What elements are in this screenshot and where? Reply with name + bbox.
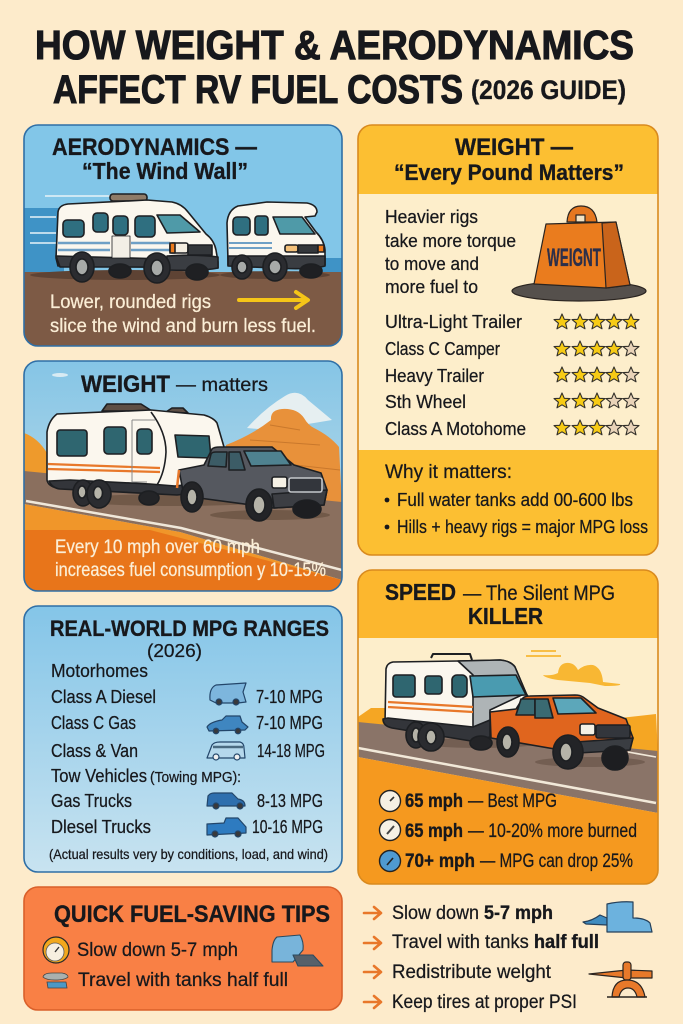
why it matters: Hills + heavy rigs = major MPG loss — [397, 517, 648, 537]
icon: gauge — [43, 937, 69, 963]
title — [35, 22, 634, 112]
tips rows — [77, 940, 288, 991]
MPG row labels: Dlesel Trucks — [51, 817, 151, 837]
MPG values: 8-13 MPG — [257, 791, 323, 811]
arrow: tip 1 — [364, 907, 381, 919]
aerodynamics caption: Lower, rounded rigs — [50, 292, 211, 313]
speed rows: — MPG can drop 25% — [480, 851, 633, 872]
panel: speed — [358, 570, 658, 884]
arrow: tip 3 — [364, 966, 381, 978]
weight matters caption: Every 10 mph over 60 mph — [55, 537, 260, 558]
aerodynamics heading: AERODYNAMICS — — [52, 134, 257, 161]
right tips list: Keep tires at proper PSI — [392, 992, 577, 1013]
illustration: grey pickup truck — [177, 447, 327, 521]
MPG footnote: (Actual results very by conditions, load, and wind) — [49, 846, 328, 862]
MPG values: 7-10 MPG — [256, 713, 323, 733]
why it matters: Why it matters: — [385, 462, 512, 483]
weight matters caption — [55, 537, 326, 581]
speed heading — [385, 579, 615, 629]
speed heading: — The Silent MPG — [463, 582, 615, 605]
speed heading: SPEED — [385, 579, 456, 605]
arrow: tip 4 — [364, 996, 381, 1008]
icon: weights — [43, 973, 68, 988]
weight intro text: take more torque — [385, 231, 516, 251]
icon: speed gauge 2 — [380, 820, 400, 840]
tips rows: Travel with tanks half full — [78, 970, 288, 991]
arrow: tip 2 — [364, 937, 381, 949]
panel: aerodynamics — [24, 125, 342, 346]
rating list labels — [385, 312, 526, 439]
weight heading: “Every Pound Matters” — [394, 160, 624, 185]
right tips list: Slow down 5-7 mph — [392, 903, 553, 924]
tips heading: QUICK FUEL-SAVING TIPS — [54, 901, 330, 928]
icon: weight block: WEIGNT — [547, 244, 601, 272]
speed rows: 65 mph — [405, 821, 463, 842]
speed rows: 65 mph — [405, 791, 463, 812]
MPG row labels: Class & Van — [51, 741, 138, 761]
panel: weight matters scene — [24, 361, 342, 591]
panel: quick fuel-saving tips — [24, 887, 342, 1010]
weight intro text: more fuel to — [385, 277, 478, 297]
icon: weight block — [512, 206, 646, 301]
weight intro text — [385, 207, 516, 297]
illustration: trailer — [383, 654, 530, 751]
icon: class A — [210, 683, 246, 705]
aerodynamics heading — [52, 134, 257, 184]
star ratings — [554, 314, 639, 435]
icon: van — [207, 742, 245, 760]
rating list labels: Sth Wheel — [385, 392, 466, 412]
speed heading: KILLER — [468, 603, 543, 629]
aerodynamics heading: “The Wind Wall” — [82, 158, 248, 184]
speed rows: — 10-20% more burned — [468, 821, 637, 842]
icon: blue tank — [583, 902, 652, 932]
icon: class C — [207, 716, 248, 734]
speed rows: — Best MPG — [468, 791, 557, 812]
MPG row labels: Motorhomes — [51, 661, 148, 681]
icon: speed gauge 1 — [380, 790, 400, 812]
MPG row labels: (Towing MPG): — [150, 769, 241, 786]
MPG values — [252, 687, 325, 837]
speed rows — [405, 791, 637, 872]
weight matters caption: increases fuel consumption y 10-15% — [55, 560, 326, 581]
panel: real-world MPG ranges — [24, 606, 342, 872]
title: AFFECT RV FUEL COSTS — [53, 68, 463, 112]
icon: water tank — [272, 935, 323, 966]
icon: speed gauge 3 — [380, 850, 400, 872]
MPG row labels: Gas Trucks — [51, 791, 132, 811]
MPG heading — [50, 616, 329, 661]
weight intro text: Heavier rigs — [385, 207, 478, 227]
why it matters: Full water tanks add 00-600 lbs — [397, 490, 633, 510]
rating list labels: Class C Camper — [385, 339, 500, 359]
tips rows: Slow down 5-7 mph — [77, 940, 238, 961]
panel: weight every pound matters — [358, 125, 658, 555]
speed rows: 70+ mph — [405, 851, 475, 872]
MPG row labels: Class A Diesel — [51, 687, 156, 707]
MPG heading: (2026) — [147, 641, 202, 661]
rating list labels: Ultra-Light Trailer — [385, 312, 522, 332]
right tips list — [392, 903, 599, 1013]
weight matters heading: WEIGHT — [81, 371, 170, 398]
icon: gas truck — [207, 793, 245, 809]
illustration: travel trailer — [47, 404, 224, 508]
weight intro text: to move and — [385, 254, 479, 274]
icon: diesel truck — [207, 818, 246, 837]
title: (2026 GUIDE) — [471, 75, 626, 105]
title: HOW WEIGHT & AERODYNAMICS — [35, 22, 634, 68]
MPG row labels — [51, 661, 241, 837]
MPG heading: REAL-WORLD MPG RANGES — [50, 616, 329, 641]
illustration: orange pickup truck — [490, 695, 633, 770]
why it matters — [385, 462, 648, 537]
right tips list: Redistribute welght — [392, 962, 552, 983]
MPG row labels: Tow Vehicles — [51, 766, 147, 786]
icon: balance seesaw — [589, 962, 652, 997]
MPG values: 14-18 MPG — [257, 741, 325, 761]
right tips list: Travel with tanks half full — [392, 932, 599, 953]
aerodynamics caption: slice the wind and burn less fuel. — [50, 316, 316, 337]
arrow: yellow right — [239, 292, 308, 308]
MPG values: 7-10 MPG — [256, 687, 323, 707]
aerodynamics caption — [50, 292, 316, 337]
rating list labels: Heavy Trailer — [385, 366, 484, 386]
rating list labels: Class A Motohome — [385, 419, 526, 439]
MPG values: 10-16 MPG — [252, 817, 323, 837]
weight heading: WEIGHT — — [455, 134, 573, 161]
weight heading — [394, 134, 624, 185]
weight matters heading — [81, 371, 268, 398]
illustration: large motorhome — [56, 194, 218, 283]
weight matters heading: — matters — [176, 375, 268, 396]
illustration: small camper van — [227, 202, 325, 281]
MPG row labels: Class C Gas — [51, 713, 136, 733]
